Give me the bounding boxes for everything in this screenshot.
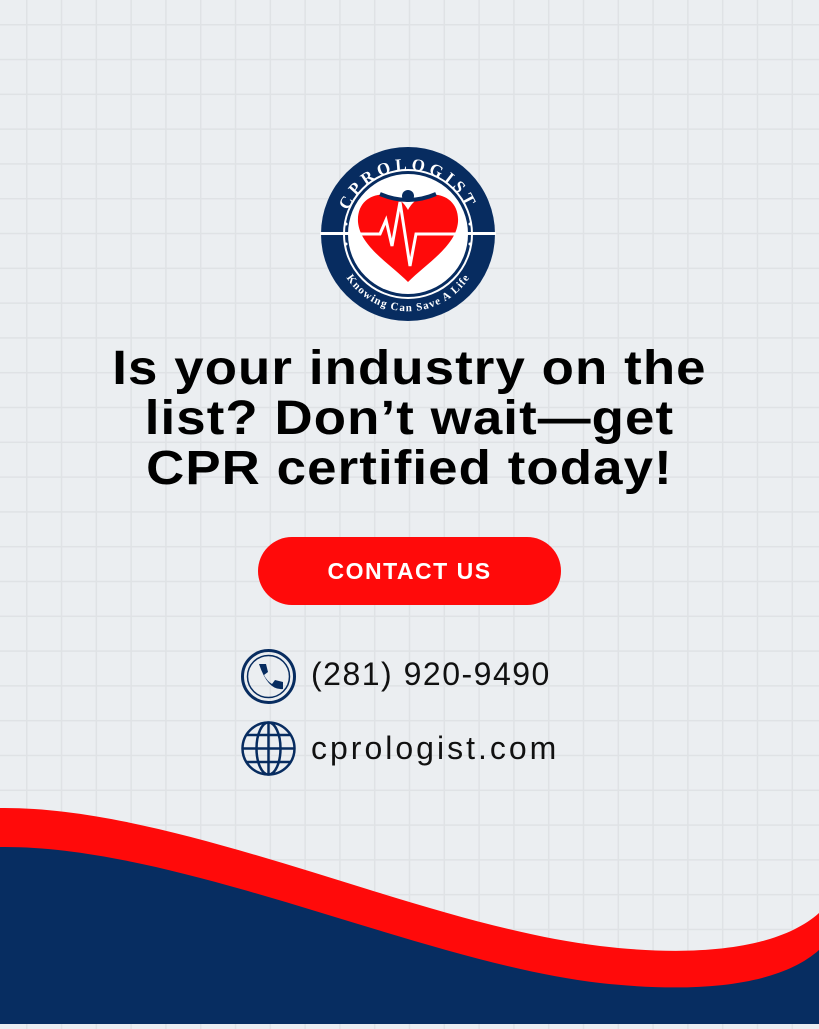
logo	[320, 147, 496, 321]
icon: globe	[241, 721, 296, 776]
button: contact us	[258, 537, 561, 605]
headline: list? Don’t wait—get	[145, 392, 674, 445]
phone number: (281) 920-9490	[311, 656, 551, 692]
logo: CPROLOGIST	[340, 159, 476, 208]
website: cprologist.com	[311, 730, 559, 766]
button: contact us: CONTACT US	[327, 558, 492, 584]
headline	[112, 342, 707, 495]
headline: Is your industry on the	[112, 342, 707, 395]
logo: Knowing Can Save A Life	[346, 274, 469, 312]
icon: phone	[241, 649, 296, 704]
headline: CPR certified today!	[146, 442, 673, 495]
